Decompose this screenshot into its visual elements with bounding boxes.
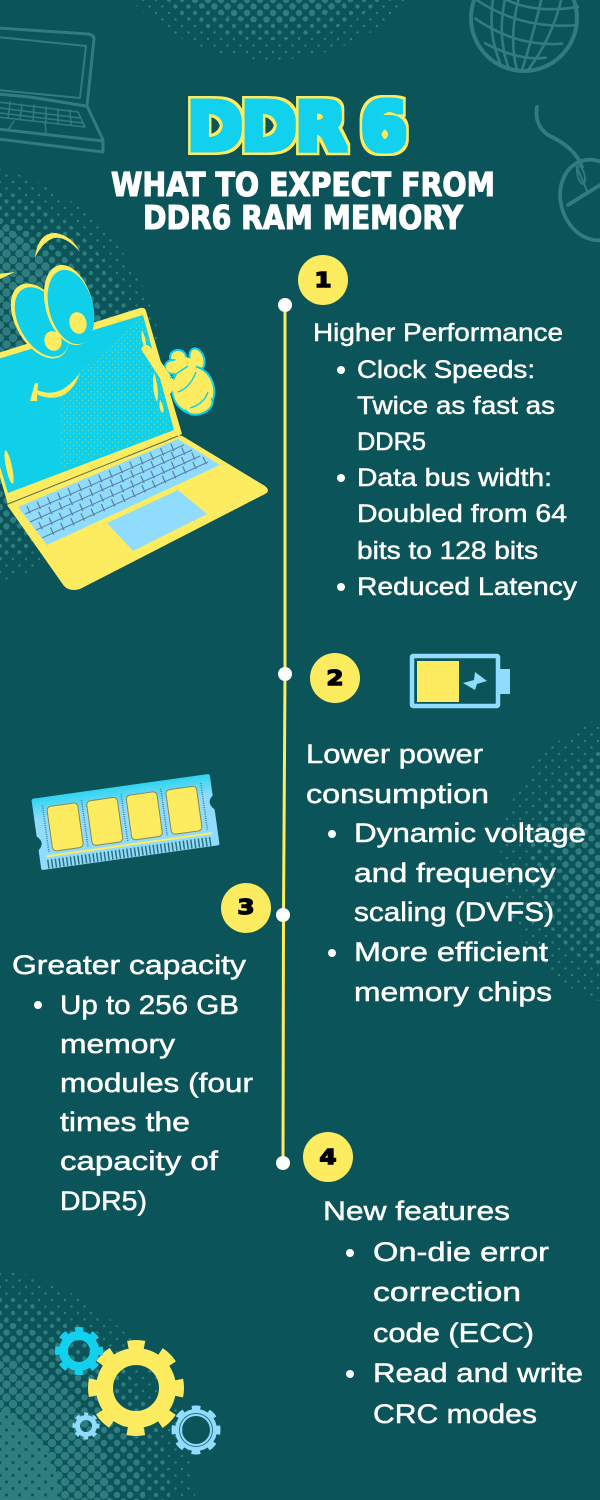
bullet list: Read and write	[373, 1358, 583, 1388]
section 3: greater capacity	[12, 950, 253, 1216]
heading: Higher Performance	[313, 319, 563, 347]
number badge 3: 3	[238, 895, 254, 919]
section 2: lower power consumption: consumption	[306, 779, 489, 809]
number badge 2: 2	[326, 666, 344, 690]
screen highlights	[142, 330, 164, 413]
subtitle	[111, 165, 495, 237]
section 2: lower power consumption	[306, 739, 586, 1007]
heading: Lower power	[306, 739, 483, 769]
bullet list: Dynamic voltage	[354, 818, 586, 848]
bullet list: correction	[373, 1277, 521, 1307]
bullet list: Data bus width:	[357, 464, 552, 492]
halftone: bottom left	[0, 1265, 195, 1500]
number badge 1	[298, 255, 348, 305]
bullet list	[328, 818, 586, 1007]
decoration: outline globe	[466, 0, 580, 71]
section 4: new features	[323, 1196, 583, 1429]
bullet list	[337, 356, 578, 601]
bullet list: times the	[60, 1107, 190, 1137]
subtitle: DDR6 RAM MEMORY	[143, 198, 464, 237]
bullet list: capacity of	[60, 1146, 219, 1176]
timeline	[276, 298, 292, 1170]
number badge 3	[221, 883, 271, 933]
number badge 4: 4	[320, 1145, 336, 1169]
laptop screen	[0, 308, 182, 505]
number badge 1: 1	[314, 268, 332, 292]
decoration: outline mouse	[536, 107, 600, 249]
bullet list: More efficient	[354, 937, 549, 967]
number badge 4	[303, 1132, 353, 1182]
bullet list: DDR5)	[60, 1186, 147, 1216]
hinge	[8, 436, 178, 504]
icon: RAM module	[31, 774, 220, 870]
heading: New features	[323, 1196, 510, 1226]
icon: battery	[412, 656, 510, 706]
bullet list: Reduced Latency	[357, 573, 578, 601]
bullet list: and frequency	[354, 858, 557, 888]
keyboard	[18, 439, 220, 545]
bullet list	[34, 990, 253, 1216]
eyes	[0, 259, 102, 369]
icon: gears	[58, 1330, 218, 1452]
bullet list	[346, 1237, 583, 1429]
bullet list: DDR5	[357, 428, 426, 456]
bullet list: memory	[60, 1029, 176, 1059]
right blue gear	[174, 1408, 218, 1452]
heading: Greater capacity	[12, 950, 247, 980]
bullet list: On-die error	[373, 1237, 549, 1267]
subtitle: WHAT TO EXPECT FROM	[111, 165, 495, 204]
cyan gear	[58, 1330, 100, 1372]
laptop base	[7, 435, 268, 590]
bullet list: Up to 256 GB	[60, 990, 239, 1020]
bullet list: memory chips	[354, 977, 552, 1007]
small blue gear	[74, 1414, 98, 1438]
halftone: right edge	[500, 710, 600, 1010]
halftone: left behind laptop	[0, 163, 162, 587]
decoration: outline laptop	[0, 28, 103, 152]
number badge 2	[310, 653, 360, 703]
trackpad	[107, 490, 207, 551]
illustration: cartoon laptop	[0, 233, 268, 590]
pointing hand	[141, 345, 219, 419]
large yellow gear	[92, 1344, 180, 1432]
title: DDR6: DDR6	[188, 88, 407, 166]
smile	[30, 373, 80, 401]
bullet list: bits to 128 bits	[357, 537, 538, 565]
halftone: top centre	[76, 0, 466, 60]
bullet list: Doubled from 64	[357, 500, 567, 528]
bullet list: scaling (DVFS)	[354, 897, 554, 927]
bullet list: Clock Speeds:	[357, 356, 535, 384]
bullet list: code (ECC)	[373, 1318, 534, 1348]
bullet list: Twice as fast as	[357, 392, 555, 420]
bullet list: modules (four	[60, 1068, 253, 1098]
bullet list: CRC modes	[373, 1399, 537, 1429]
eyebrows	[0, 233, 80, 280]
section 1: higher performance	[313, 319, 578, 601]
